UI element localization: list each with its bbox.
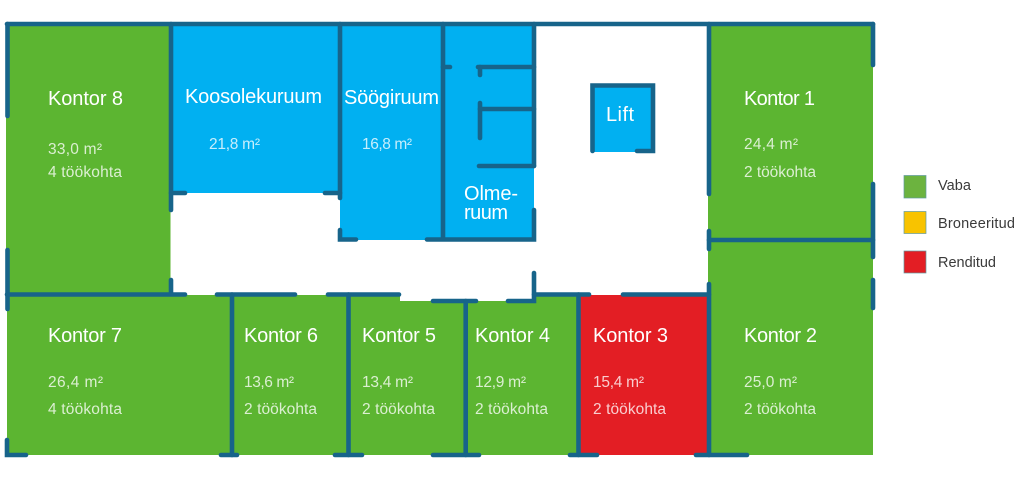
room: Kontor 1: 2 töökohta (744, 164, 816, 181)
room: Kontor 1 (708, 24, 873, 240)
room: Koosolekuruum (171, 24, 340, 193)
room: Lift: Lift (606, 104, 634, 126)
room: Kontor 8: Kontor 8 (48, 88, 123, 110)
room: Söögiruum: Söögiruum (344, 87, 439, 109)
room: Kontor 3 (rented): Kontor 3 (593, 325, 668, 347)
legend item: Renditud: Renditud (938, 255, 996, 271)
room: Kontor 6: 2 töökohta (244, 401, 317, 418)
room: Söögiruum (340, 24, 443, 240)
room: Kontor 8: 4 töökohta (48, 164, 122, 181)
room: Koosolekuruum: 21,8 m² (209, 136, 260, 153)
room: Kontor 5 (348, 295, 466, 455)
room: Kontor 4: 2 töökohta (475, 401, 548, 418)
floor plan (6, 24, 873, 455)
room: Kontor 3 (rented) (578, 295, 709, 455)
room: Kontor 2 (708, 240, 873, 455)
room: Olmeruum: ruum (464, 202, 508, 224)
room: Kontor 4: Kontor 4 (475, 325, 550, 347)
room: Kontor 6 (232, 295, 349, 455)
room: Olmeruum (443, 24, 534, 240)
room: Kontor 5: Kontor 5 (362, 325, 436, 347)
room: Kontor 5: 2 töökohta (362, 401, 435, 418)
legend item: Vaba: Vaba (938, 178, 972, 194)
room: Kontor 3 (rented): 2 töökohta (593, 401, 666, 418)
walls (7, 24, 873, 455)
room: Kontor 7 (7, 295, 233, 455)
room: Lift (592, 85, 653, 152)
room: Kontor 7: 26,4 m² (48, 374, 103, 391)
room: Olmeruum: Olme- (464, 183, 518, 205)
room: Kontor 1: Kontor 1 (744, 88, 815, 110)
room: Kontor 6: Kontor 6 (244, 325, 318, 347)
room: Kontor 7: 4 töökohta (48, 401, 122, 418)
room: Kontor 3 (rented): 15,4 m² (593, 374, 644, 391)
room: Kontor 5: 13,4 m² (362, 374, 413, 391)
room: Kontor 8 (6, 24, 170, 295)
room: Kontor 2: 2 töökohta (744, 401, 816, 418)
room: Kontor 4: 12,9 m² (475, 374, 526, 391)
room: Kontor 1: 24,4 m² (744, 136, 798, 153)
room: Kontor 8: 33,0 m² (48, 141, 102, 158)
legend item: Broneeritud: Broneeritud (938, 216, 1015, 232)
room: Kontor 7: Kontor 7 (48, 325, 122, 347)
legend (904, 176, 1015, 273)
room: Koosolekuruum: Koosolekuruum (185, 86, 322, 108)
room: Söögiruum: 16,8 m² (362, 136, 412, 153)
room: Kontor 4 (466, 295, 579, 455)
room: Kontor 2: 25,0 m² (744, 374, 797, 391)
room: Kontor 2: Kontor 2 (744, 325, 817, 347)
room: Kontor 6: 13,6 m² (244, 374, 294, 391)
